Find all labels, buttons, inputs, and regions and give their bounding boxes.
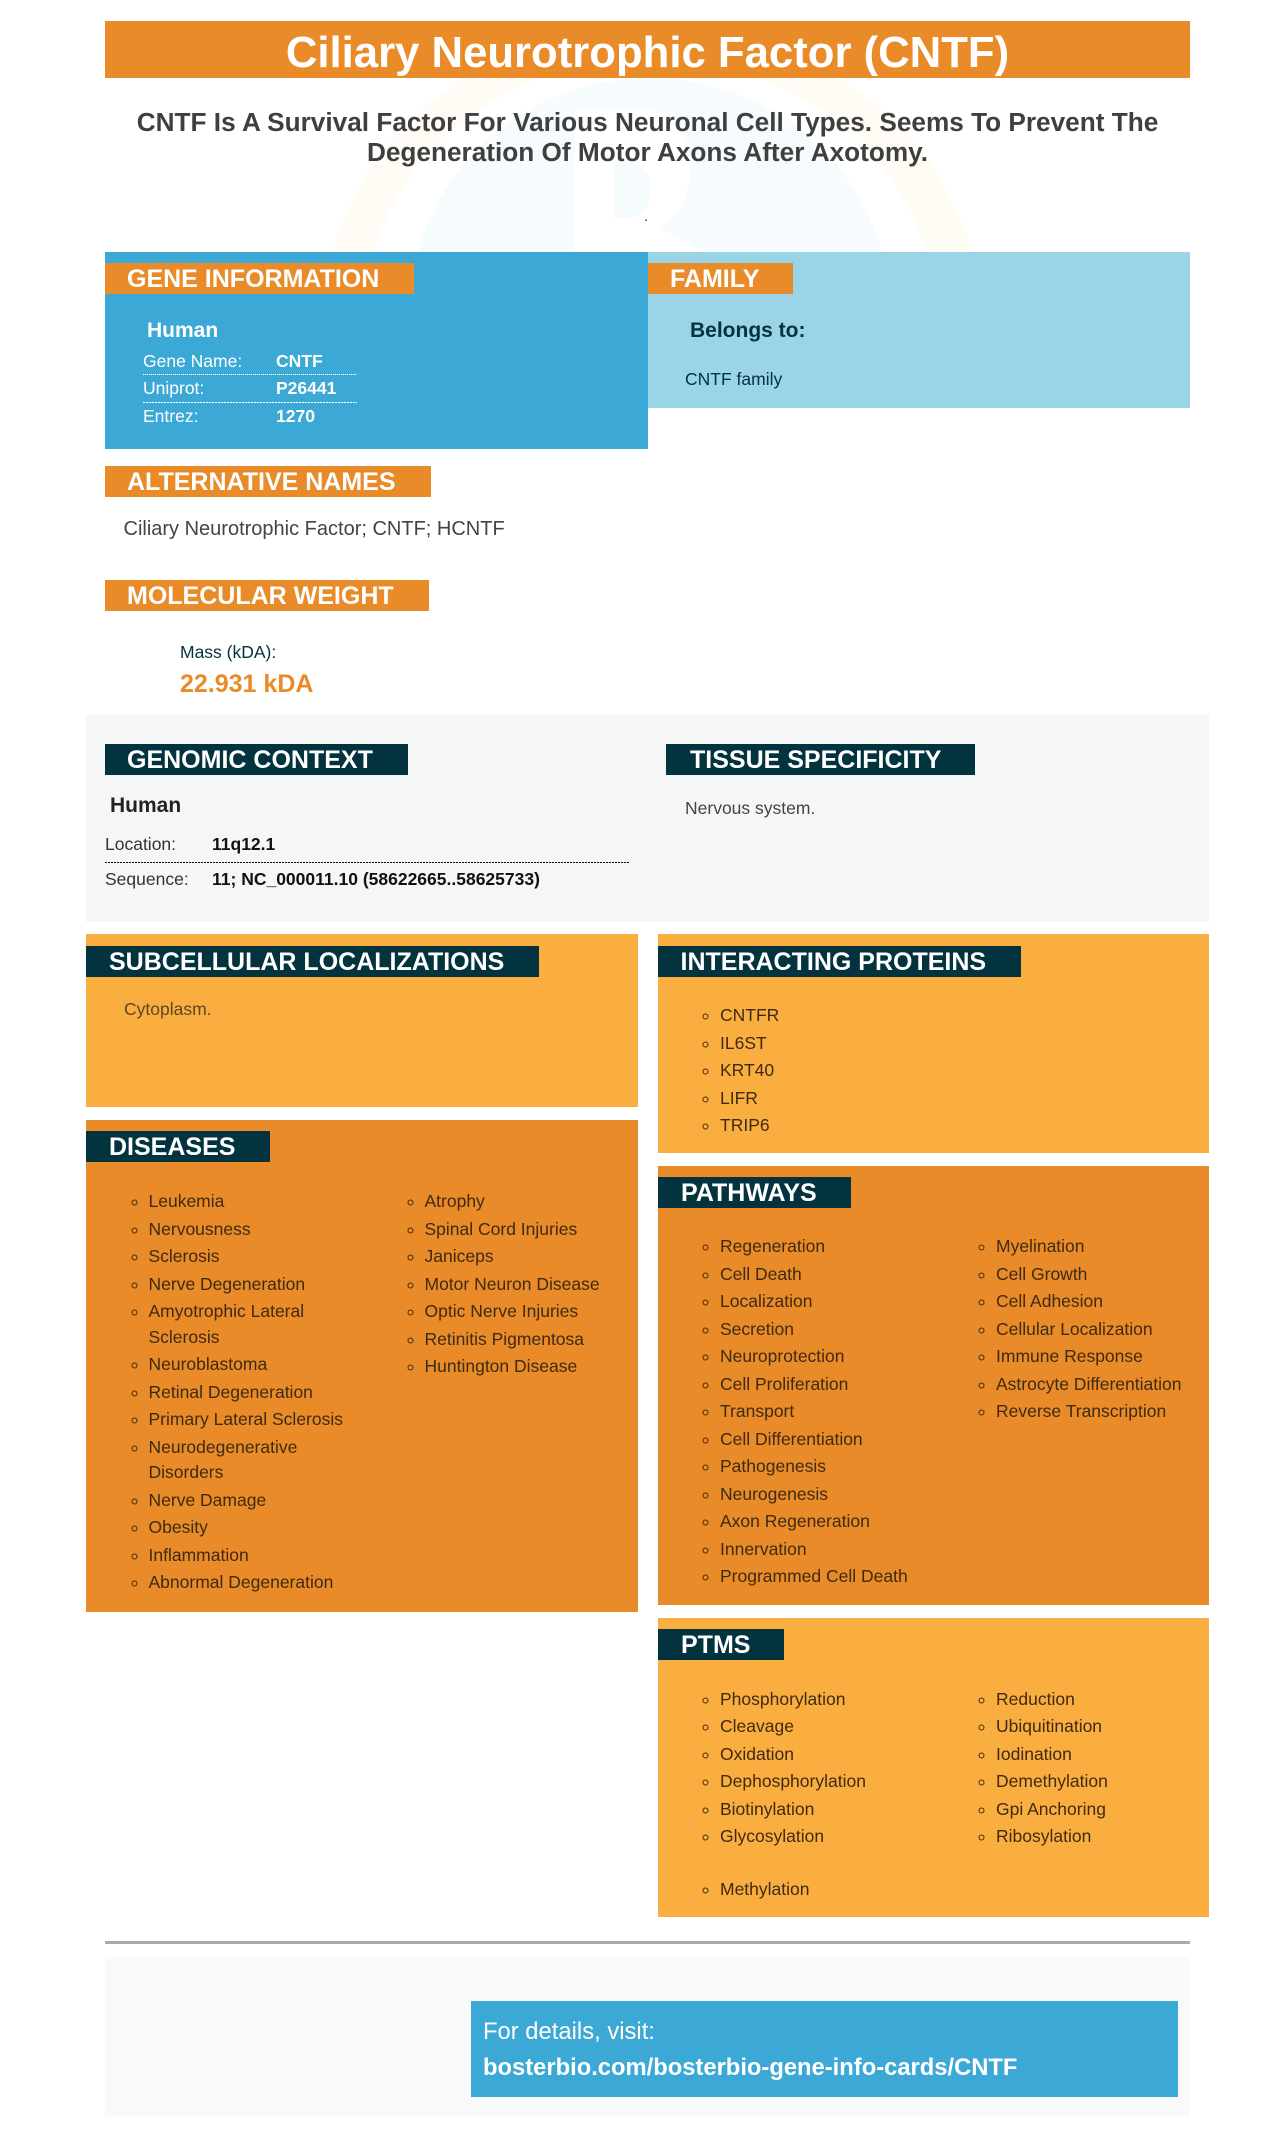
list: diseases column one: Neuroblastoma xyxy=(148,1354,267,1374)
heading: interacting proteins: INTERACTING PROTEINS xyxy=(680,948,986,976)
list: diseases column two: Retinitis Pigmentosa xyxy=(424,1328,584,1348)
list: diseases column one: Obesity xyxy=(148,1517,208,1537)
list: diseases column two xyxy=(408,1191,600,1376)
list: pathways column one: Axon Regeneration xyxy=(720,1511,870,1531)
list: diseases column two: Optic Nerve Injuries xyxy=(424,1301,578,1321)
list: diseases column one: Retinal Degeneration xyxy=(148,1382,313,1402)
mass label: Mass (kDA): xyxy=(180,642,276,662)
sequence row: Sequence: xyxy=(105,869,189,889)
list: pathways column one: Programmed Cell Death xyxy=(720,1566,908,1586)
gene table: Gene Name: xyxy=(143,351,242,371)
list: diseases column one: Nerve Degeneration xyxy=(148,1274,305,1294)
list: interacting proteins: TRIP6 xyxy=(720,1115,770,1135)
list: ptms column one: Dephosphorylation xyxy=(720,1771,866,1791)
location row: Location: xyxy=(105,834,176,854)
heading: ptms xyxy=(658,1629,784,1660)
list: pathways column one: Cell Differentiation xyxy=(720,1428,863,1448)
list: pathways column one xyxy=(702,1236,908,1586)
list: pathways column two: Reverse Transcription xyxy=(996,1401,1166,1421)
belongs to label: Belongs to: xyxy=(690,319,806,342)
list: ptms column one: Phosphorylation xyxy=(720,1688,846,1708)
list: diseases column one xyxy=(132,1191,343,1592)
list: pathways column two: Immune Response xyxy=(996,1346,1143,1366)
heading: diseases: DISEASES xyxy=(109,1133,235,1161)
callout: details link xyxy=(471,2001,1178,2097)
gene table: CNTF xyxy=(276,351,323,371)
alternative names text: Ciliary Neurotrophic Factor; CNTF; HCNTF xyxy=(124,518,505,540)
list: ptms column one: Oxidation xyxy=(720,1744,794,1764)
list: diseases column two: Motor Neuron Disease xyxy=(424,1274,600,1294)
list: interacting proteins: IL6ST xyxy=(720,1032,767,1052)
heading: tissue specificity: TISSUE SPECIFICITY xyxy=(690,746,941,774)
heading: pathways: PATHWAYS xyxy=(681,1179,817,1207)
list: ptms column one: Glycosylation xyxy=(720,1826,824,1846)
species label: Human xyxy=(110,794,181,817)
panel: alternative names xyxy=(105,466,505,540)
heading: genomic context: GENOMIC CONTEXT xyxy=(127,746,373,774)
panel: genomic context and tissue specificity xyxy=(86,715,1209,922)
heading: ptms: PTMS xyxy=(681,1631,750,1659)
list: diseases column two: Huntington Disease xyxy=(424,1356,577,1376)
heading: diseases xyxy=(86,1131,270,1162)
title: Ciliary Neurotrophic Factor (CNTF) xyxy=(286,28,1009,77)
list: diseases column one: Amyotrophic Lateral Sclerosis xyxy=(148,1301,304,1347)
panel: ptms xyxy=(658,1618,1209,1917)
list: ptms column two: Demethylation xyxy=(996,1771,1108,1791)
list: pathways column one: Transport xyxy=(720,1401,794,1421)
species label: Human xyxy=(147,319,218,342)
list: pathways column one: Cell Proliferation xyxy=(720,1374,848,1394)
subtitle: Degeneration Of Motor Axons After Axotomy. xyxy=(367,136,928,166)
list: pathways column two: Cellular Localization xyxy=(996,1318,1153,1338)
panel: gene information xyxy=(105,252,648,449)
gene table: P26441 xyxy=(276,378,336,398)
subcellular text: Cytoplasm. xyxy=(124,999,212,1019)
callout url: bosterbio.com/bosterbio-gene-info-cards/CNTF xyxy=(483,2054,1017,2081)
list: ptms column one: Methylation xyxy=(720,1879,810,1899)
list: pathways column two: Cell Adhesion xyxy=(996,1291,1103,1311)
list: ptms column two: Reduction xyxy=(996,1688,1075,1708)
gene table xyxy=(143,351,357,426)
list: ptms column two xyxy=(978,1688,1108,1846)
subtitle xyxy=(137,107,1158,166)
panel: footer xyxy=(105,1957,1190,2116)
panel: pathways xyxy=(658,1166,1209,1605)
panel: molecular weight xyxy=(105,580,429,698)
list: ptms column one xyxy=(702,1688,866,1899)
list: pathways column one: Cell Death xyxy=(720,1264,802,1284)
list: ptms column two: Ribosylation xyxy=(996,1826,1091,1846)
list: interacting proteins xyxy=(702,1005,779,1135)
heading: pathways xyxy=(658,1177,851,1208)
list: pathways column two xyxy=(978,1236,1181,1421)
list: pathways column one: Localization xyxy=(720,1291,812,1311)
dot text: . xyxy=(644,208,648,224)
list: pathways column one: Pathogenesis xyxy=(720,1456,826,1476)
list: diseases column one: Abnormal Degeneration xyxy=(148,1572,333,1592)
list: diseases column one: Inflammation xyxy=(148,1545,249,1565)
heading: alternative names: ALTERNATIVE NAMES xyxy=(127,468,396,496)
list: ptms column one: Cleavage xyxy=(720,1716,794,1736)
title xyxy=(105,21,1190,78)
gene table: Entrez: xyxy=(143,406,198,426)
list: ptms column two: Gpi Anchoring xyxy=(996,1798,1106,1818)
panel: diseases xyxy=(86,1120,638,1612)
watermark logo xyxy=(333,78,971,252)
list: interacting proteins: KRT40 xyxy=(720,1060,774,1080)
list: pathways column two: Astrocyte Differentiation xyxy=(996,1374,1181,1394)
list: interacting proteins: LIFR xyxy=(720,1088,758,1108)
list: diseases column one: Nerve Damage xyxy=(148,1490,266,1510)
list: diseases column two: Atrophy xyxy=(424,1191,485,1211)
list: pathways column one: Regeneration xyxy=(720,1236,825,1256)
list: pathways column one: Secretion xyxy=(720,1318,794,1338)
location row: 11q12.1 xyxy=(212,834,275,854)
panel: subcellular localizations xyxy=(86,934,638,1107)
callout label: For details, visit: xyxy=(483,2018,655,2045)
gene table: Uniprot: xyxy=(143,378,204,398)
gene table: 1270 xyxy=(276,406,315,426)
heading: gene information: GENE INFORMATION xyxy=(127,265,379,293)
list: diseases column one: Neurodegenerative Disorders xyxy=(148,1437,297,1482)
list: pathways column one: Innervation xyxy=(720,1538,807,1558)
list: ptms column two: Iodination xyxy=(996,1744,1072,1764)
list: pathways column two: Cell Growth xyxy=(996,1264,1087,1284)
list: pathways column one: Neurogenesis xyxy=(720,1484,828,1504)
list: diseases column one: Sclerosis xyxy=(148,1246,220,1266)
list: diseases column two: Spinal Cord Injuries xyxy=(424,1218,577,1238)
heading: subcellular localizations: SUBCELLULAR LOCALIZATIONS xyxy=(109,948,504,976)
list: interacting proteins: CNTFR xyxy=(720,1005,779,1025)
heading: family: FAMILY xyxy=(670,265,759,293)
list: diseases column one: Nervousness xyxy=(148,1218,251,1238)
list: pathways column one: Neuroprotection xyxy=(720,1346,845,1366)
list: ptms column two: Ubiquitination xyxy=(996,1716,1102,1736)
panel: family xyxy=(648,252,1190,408)
list: diseases column one: Leukemia xyxy=(148,1191,224,1211)
list: ptms column one: Biotinylation xyxy=(720,1798,814,1818)
list: diseases column one: Primary Lateral Sclerosis xyxy=(148,1409,343,1429)
panel: interacting proteins xyxy=(658,934,1209,1153)
subtitle: CNTF Is A Survival Factor For Various Neuronal Cell Types. Seems To Prevent The xyxy=(137,107,1158,137)
heading: family xyxy=(648,263,793,294)
sequence row: 11; NC_000011.10 (58622665..58625733) xyxy=(212,869,540,889)
location row xyxy=(105,834,275,854)
heading: molecular weight: MOLECULAR WEIGHT xyxy=(127,582,394,610)
list: pathways column two: Myelination xyxy=(996,1236,1085,1256)
family text: CNTF family xyxy=(685,369,782,389)
mass value: 22.931 kDA xyxy=(180,670,313,698)
list: diseases column two: Janiceps xyxy=(424,1246,494,1266)
tissue text: Nervous system. xyxy=(685,798,815,818)
